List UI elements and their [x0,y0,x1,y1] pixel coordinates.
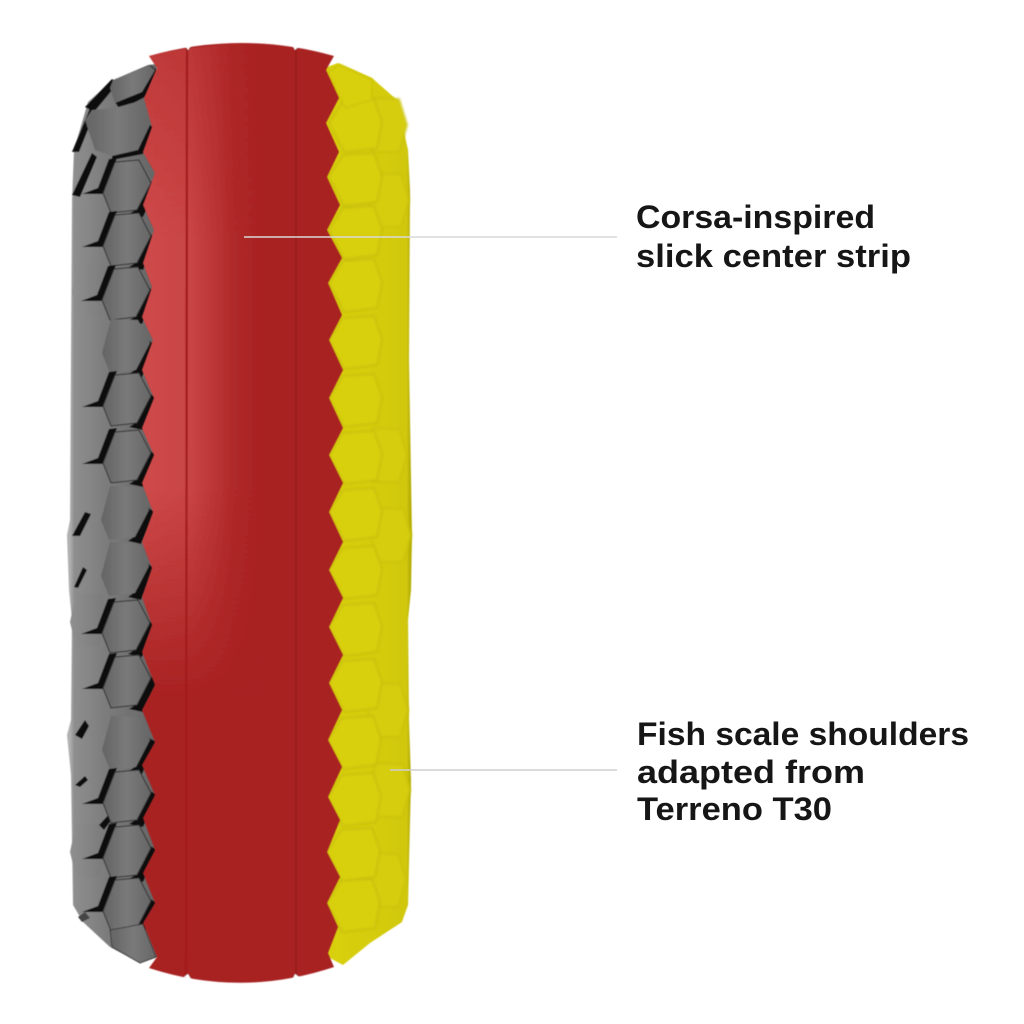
callout text: fish scale shoulders: Terreno T30 [637,791,832,827]
yellow tread shoulder [324,63,412,965]
red slick center strip [142,43,343,983]
callout line: shoulders [390,769,617,771]
callout text: slick center strip: Corsa-inspired [636,199,875,235]
tire illustration [67,43,412,983]
callout text: fish scale shoulders [637,716,969,827]
callout text: fish scale shoulders: adapted from [637,754,865,790]
grey tread shoulder [67,64,158,963]
callout text: fish scale shoulders: Fish scale shoulders [637,716,969,752]
callout text: slick center strip: slick center strip [636,238,911,274]
callout line: center strip [244,236,617,238]
callout text: slick center strip [636,199,911,274]
